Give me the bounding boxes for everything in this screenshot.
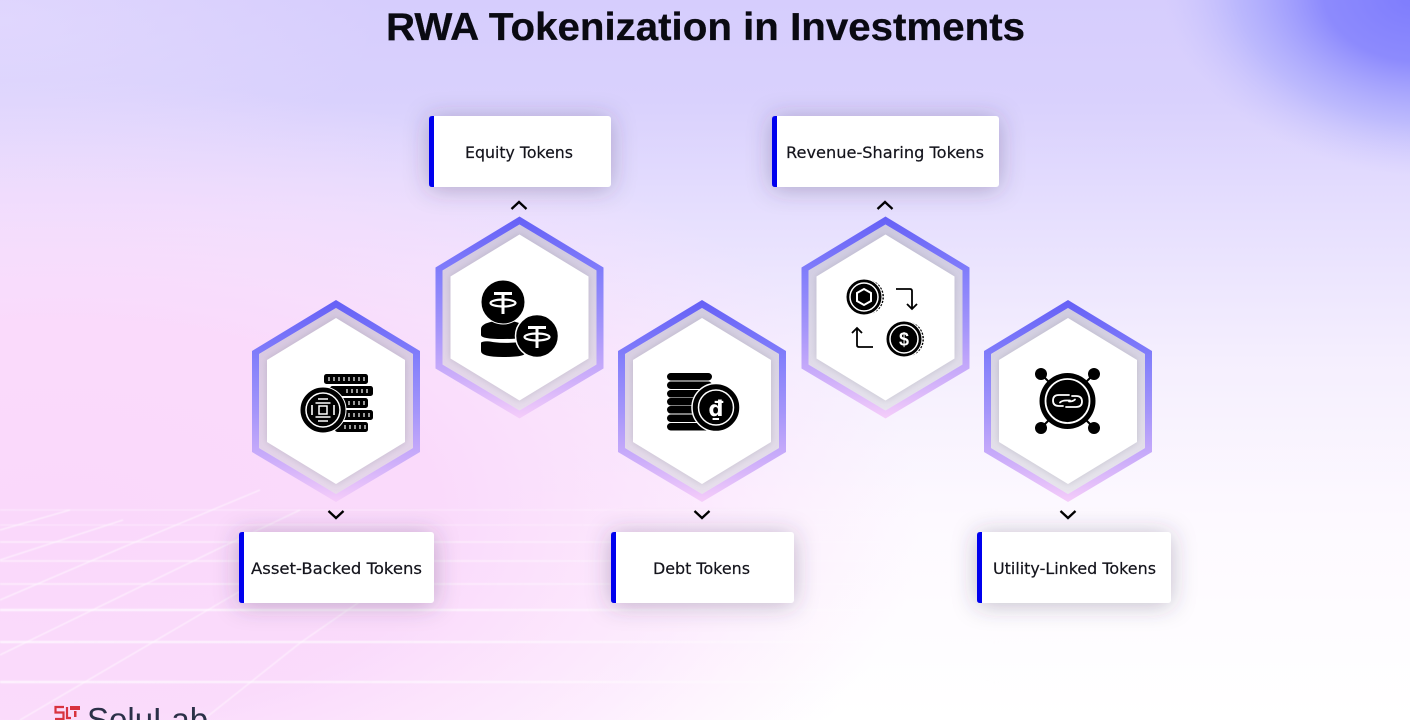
perspective grid floor bbox=[0, 490, 1000, 720]
card: asset-backed tokens bbox=[239, 532, 434, 603]
chevron: utility-linked down bbox=[1060, 511, 1076, 518]
hexagon: asset-backed tokens bbox=[252, 300, 420, 502]
chevron: asset-backed down bbox=[328, 511, 344, 518]
card: debt tokens bbox=[611, 532, 794, 603]
hexagon: revenue-sharing tokens bbox=[802, 216, 970, 418]
icon: tether coins bbox=[481, 280, 558, 358]
icon: coin exchange arrows bbox=[846, 279, 922, 357]
card: debt tokens: Debt Tokens bbox=[653, 559, 750, 578]
card: revenue-sharing tokens: Revenue-Sharing Tokens bbox=[786, 143, 984, 162]
card: utility-linked tokens bbox=[977, 532, 1171, 603]
card: equity tokens bbox=[429, 116, 611, 187]
icon: chain link network coin bbox=[1035, 368, 1100, 434]
hexagon: equity tokens bbox=[436, 216, 604, 418]
chevron: revenue-sharing up bbox=[878, 202, 892, 209]
hexagon: debt tokens bbox=[618, 300, 786, 502]
icon: coin exchange arrows: $ bbox=[899, 330, 909, 350]
icon: dong coin stack bbox=[667, 373, 740, 432]
icon: dong coin stack: ₫ bbox=[709, 397, 724, 421]
chevron: equity up bbox=[512, 202, 526, 209]
chevron: debt down bbox=[694, 511, 710, 518]
card: equity tokens: Equity Tokens bbox=[465, 143, 573, 162]
title: RWA Tokenization in Investments bbox=[386, 6, 1025, 49]
card: revenue-sharing tokens bbox=[772, 116, 999, 187]
icon: coin and chip stack bbox=[300, 374, 373, 433]
card: utility-linked tokens: Utility-Linked Tokens bbox=[993, 559, 1156, 578]
card: asset-backed tokens: Asset-Backed Tokens bbox=[251, 559, 422, 578]
hexagon: utility-linked tokens bbox=[984, 300, 1152, 502]
